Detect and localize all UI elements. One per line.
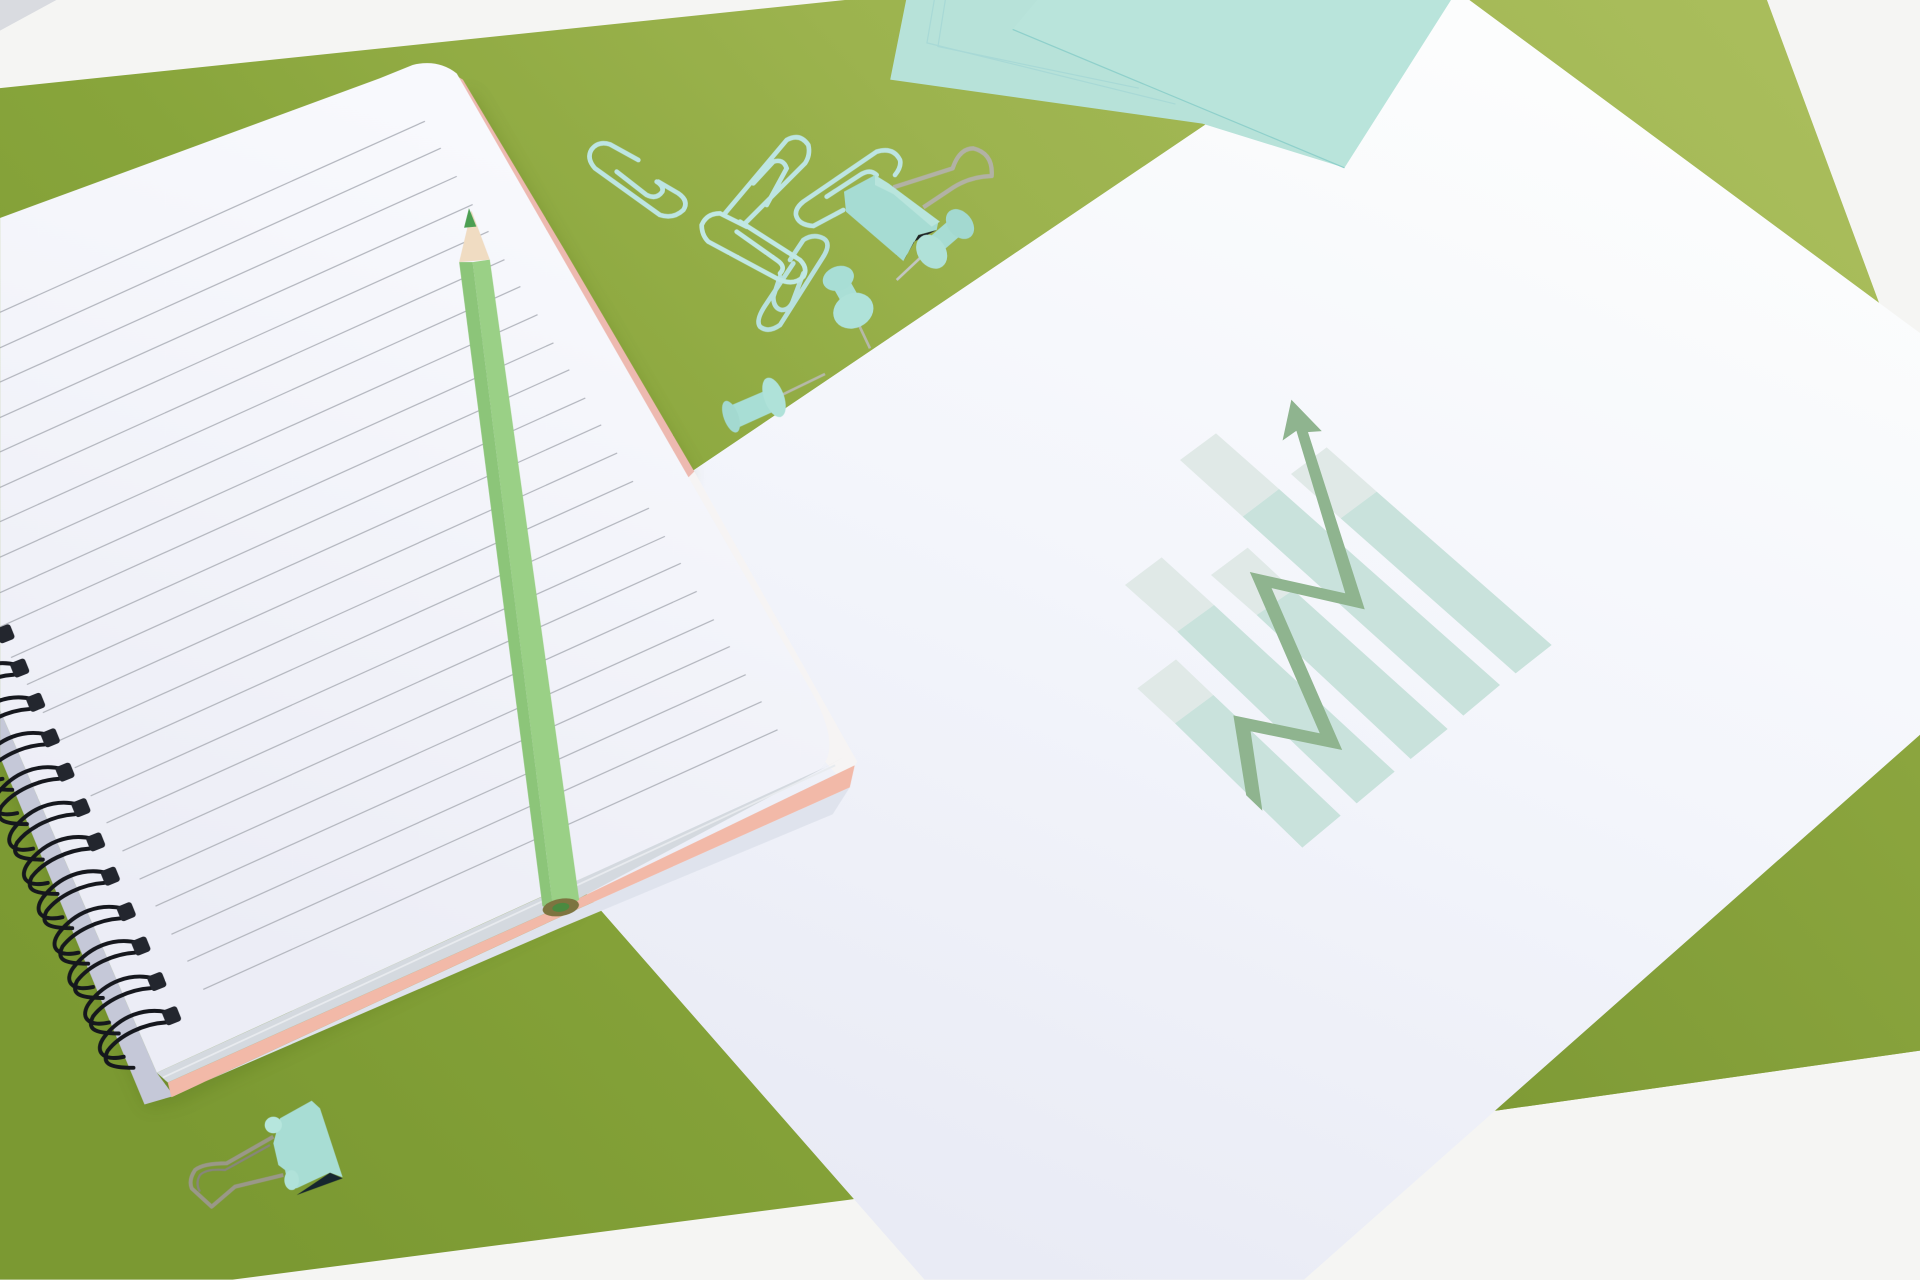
clip wire [191, 1137, 283, 1207]
mint sticky notes [890, 0, 1451, 168]
clip body [273, 1101, 343, 1188]
paper clip 3 [796, 150, 900, 226]
rising zigzag arrow [1234, 401, 1364, 809]
bar 1 [1137, 659, 1341, 848]
white document sheet [490, 0, 1920, 1280]
green pencil [459, 208, 580, 919]
sliver: grey paper corner [0, 0, 56, 31]
bar 3 [1211, 548, 1448, 759]
paper clip 2 [725, 137, 809, 223]
top page [0, 63, 829, 1073]
spiral binding [0, 588, 182, 1068]
binder clip body [844, 175, 940, 261]
push pin 3 [718, 374, 825, 435]
pink cover front edge [168, 765, 855, 1097]
lower page stack [171, 787, 850, 1097]
paper clip 5 [758, 236, 827, 330]
push pin 2 [819, 262, 879, 348]
back cover edge [0, 710, 174, 1104]
bar 5 [1291, 447, 1552, 673]
clip tabs [265, 1117, 299, 1190]
pink cover [457, 76, 694, 480]
green paper lower right [1457, 722, 1920, 1111]
growth chart printed on paper [1125, 401, 1552, 848]
notebook [0, 63, 857, 1104]
notebook shadow [0, 92, 692, 1108]
ruled lines [0, 121, 778, 989]
paper clip 4 [702, 213, 805, 282]
push pin on binder clip [897, 204, 980, 280]
bar 2 [1125, 557, 1395, 803]
page stack [157, 757, 845, 1082]
paper clips and pins [589, 137, 992, 435]
cream cover edge [686, 471, 857, 784]
paper clip 1 [589, 143, 685, 216]
bar 4 [1180, 433, 1500, 716]
clip underside [297, 1173, 343, 1195]
small binder clip [191, 1101, 343, 1207]
binder clip wire [893, 148, 992, 207]
